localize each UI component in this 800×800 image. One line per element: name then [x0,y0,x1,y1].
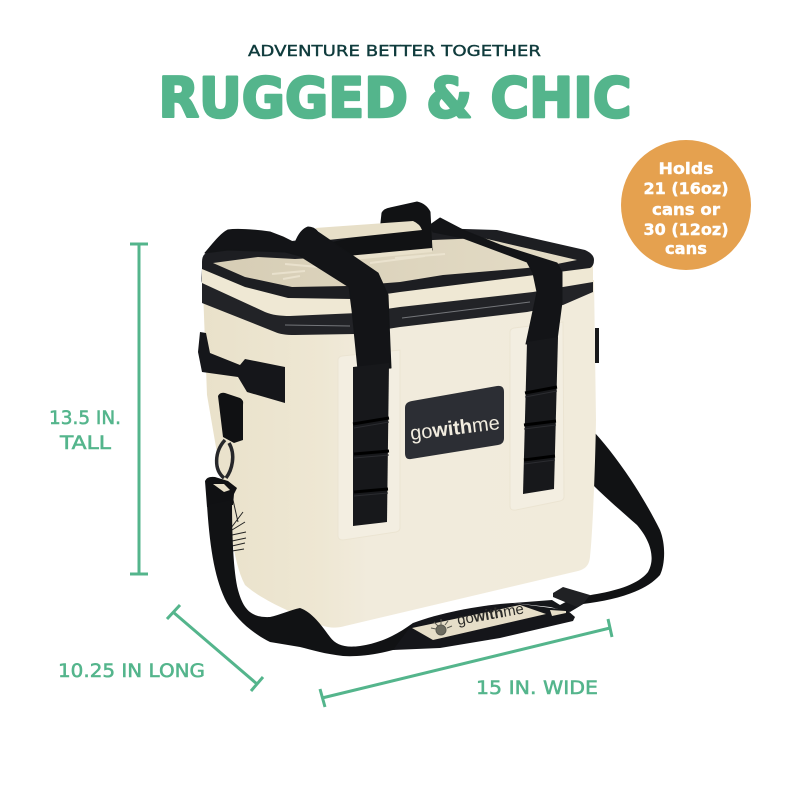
title: RUGGED & CHIC [158,66,632,130]
badge: can capacity [621,140,751,270]
label: length: 10.25 IN LONG [58,661,205,682]
badge: can capacity: cans [665,239,707,258]
shoulder pad: gowithme [456,600,525,629]
logo patch [405,386,504,459]
embossed lid logos [272,254,445,279]
bag body [203,280,596,628]
handle left [205,227,391,370]
side logo marks [231,500,246,551]
lid top [213,238,577,287]
webbing left [353,363,389,526]
subtitle: ADVENTURE BETTER TOGETHER [248,42,541,60]
embossed panel left [338,350,400,540]
lid cream band [202,265,593,316]
pad sun logo [431,619,452,635]
label: height: TALL [59,433,112,454]
label: height: 13.5 IN. [49,408,121,429]
cooler bag [198,202,664,656]
dimension: length [167,605,263,691]
zipper seal [202,267,593,335]
strip on lid [347,248,432,260]
shoulder pad [393,600,575,650]
badge: can capacity: Holds [658,159,714,178]
strap buckle [513,587,590,612]
strap clip [205,393,243,507]
embossed panel right [510,322,564,510]
side handle right nub [595,328,599,363]
badge: can capacity: cans or [652,200,720,219]
top center handle flap [315,221,422,240]
lid rim [202,227,594,299]
zipper highlight [285,302,530,326]
webbing right [523,337,558,494]
label: width: 15 IN. WIDE [476,678,598,699]
dimension: width [320,619,612,707]
side handle left [198,332,285,403]
logo patch: gowithme [409,412,501,445]
shoulder strap: right section [578,433,664,604]
top center handle [330,202,432,258]
badge: can capacity: 21 (16oz) [644,179,728,198]
shoulder strap: left section [207,500,440,656]
handle right [430,218,562,344]
label: height [49,408,121,454]
dimension: height [130,244,148,574]
badge: can capacity: 30 (12oz) [644,220,728,239]
